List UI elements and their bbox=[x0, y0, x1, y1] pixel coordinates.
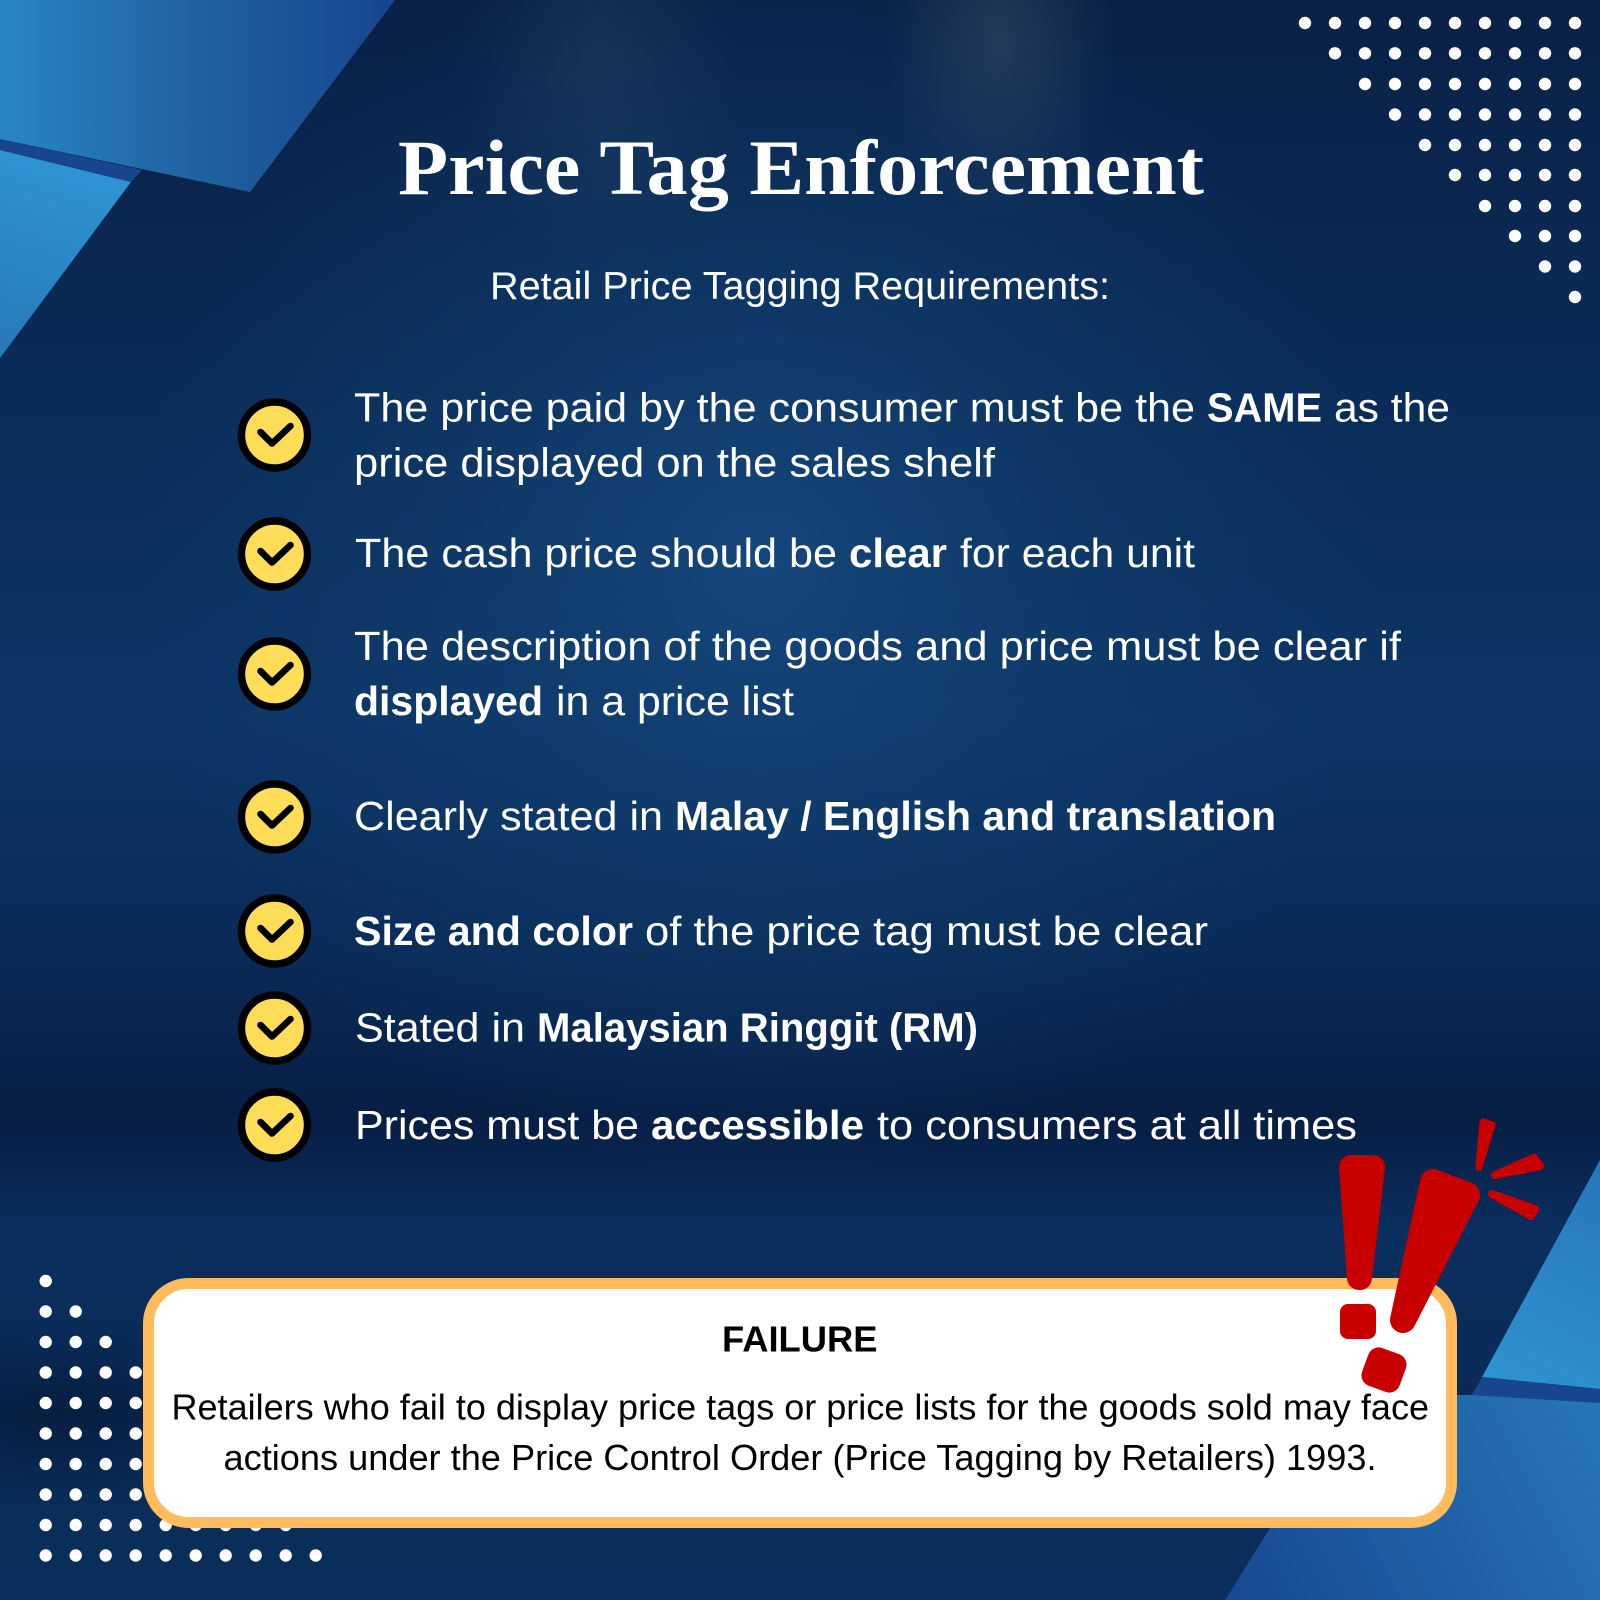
item 3 text bbox=[354, 623, 1402, 724]
icon: check bbox=[242, 641, 308, 707]
item 7 text: Prices must be bbox=[355, 1102, 639, 1148]
item 4 text: Malay / English and translation bbox=[675, 793, 1276, 839]
item 6 text: Malaysian Ringgit (RM) bbox=[537, 1004, 978, 1050]
item 2 bbox=[242, 521, 1196, 587]
item 3 text: displayed bbox=[354, 678, 543, 724]
callout text: Retailers who fail to display price tags or price lists for the goods sold may face bbox=[172, 1386, 1429, 1428]
item 1 text: price displayed on the sales shelf bbox=[354, 440, 996, 486]
item 3 bbox=[242, 623, 1402, 724]
callout text: actions under the Price Control Order (Price Tagging by Retailers) 1993. bbox=[224, 1437, 1376, 1478]
icon: check bbox=[242, 995, 308, 1061]
icon: red exclamation marks bbox=[1345, 1122, 1540, 1385]
icon: check bbox=[242, 521, 308, 587]
item 7 text bbox=[355, 1102, 1357, 1148]
icon: check bbox=[242, 1092, 308, 1158]
item 1 text: SAME bbox=[1207, 384, 1322, 430]
item 2 text bbox=[355, 530, 1196, 576]
bottom-right geometric shapes bbox=[1225, 1160, 1600, 1600]
item 5 text: Size and color bbox=[354, 908, 633, 954]
panel: failure callout bbox=[148, 1284, 1452, 1522]
item 1 text: The price paid by the consumer must be the bbox=[354, 384, 1195, 430]
title: Price Tag Enforcement bbox=[398, 124, 1204, 211]
callout box bbox=[148, 1284, 1452, 1522]
dot pattern: top right bbox=[1305, 23, 1576, 297]
item 7 bbox=[242, 1092, 1357, 1158]
item 2 text: for each unit bbox=[960, 530, 1196, 576]
item 6 text: Stated in bbox=[355, 1004, 525, 1050]
item 7 text: to consumers at all times bbox=[877, 1102, 1357, 1148]
item 5 bbox=[242, 898, 1208, 964]
item 6 bbox=[242, 995, 978, 1061]
item 7 text: accessible bbox=[651, 1102, 864, 1148]
item 5 text bbox=[354, 908, 1208, 954]
top-left geometric shapes bbox=[0, 0, 395, 358]
item 4 text: Clearly stated in bbox=[354, 793, 663, 839]
item 4 bbox=[242, 784, 1276, 850]
item 1 text: as the bbox=[1334, 384, 1450, 430]
dot pattern: bottom left bbox=[46, 1281, 316, 1556]
item 4 text bbox=[354, 793, 1276, 839]
item 1 text bbox=[354, 384, 1450, 486]
item 1 bbox=[242, 384, 1450, 486]
item 3 text: The description of the goods and price must be clear if bbox=[354, 623, 1402, 669]
subtitle: Retail Price Tagging Requirements: bbox=[490, 265, 1110, 308]
item 6 text bbox=[355, 1004, 978, 1050]
icon: check bbox=[242, 402, 308, 468]
item 3 text: in a price list bbox=[556, 678, 795, 724]
item 2 text: clear bbox=[849, 530, 947, 576]
item 2 text: The cash price should be bbox=[355, 530, 837, 576]
checklist bbox=[242, 384, 1450, 1158]
item 5 text: of the price tag must be clear bbox=[645, 908, 1208, 954]
callout text bbox=[172, 1386, 1429, 1478]
icon: check bbox=[242, 898, 308, 964]
callout heading: FAILURE bbox=[722, 1318, 878, 1360]
icon: check bbox=[242, 784, 308, 850]
